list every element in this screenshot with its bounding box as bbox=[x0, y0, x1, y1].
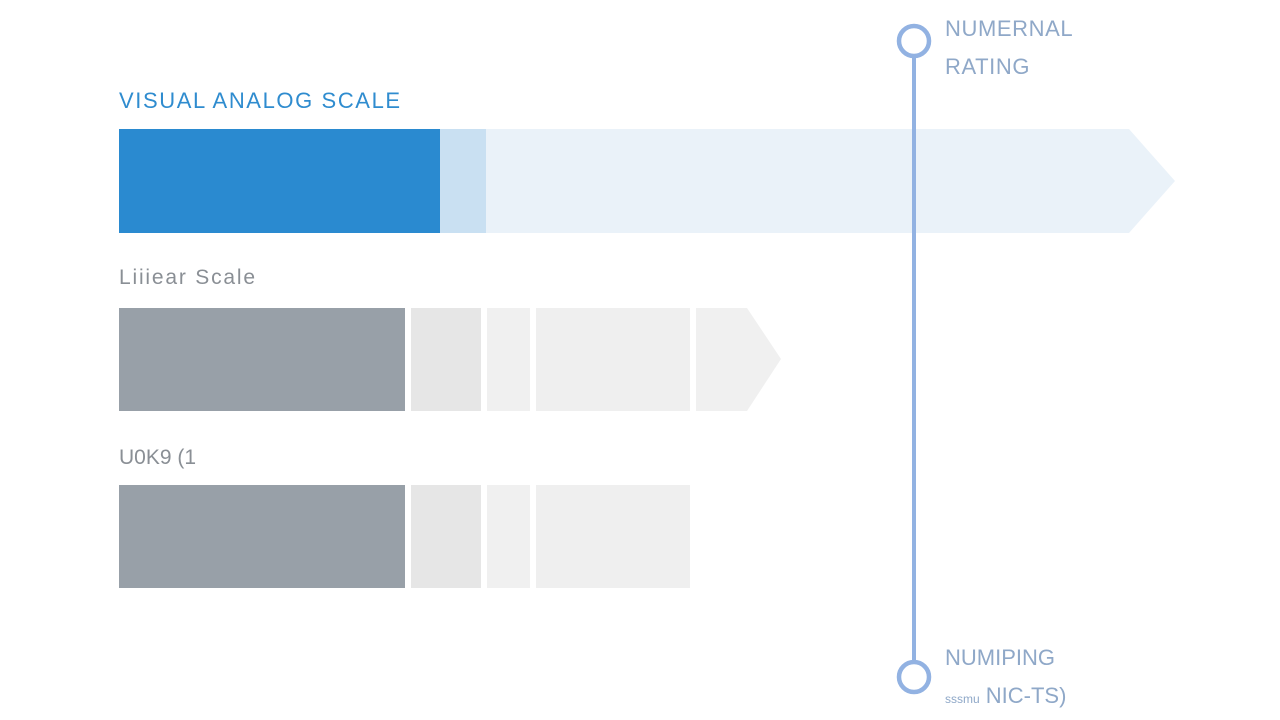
bar: visual analog scale bbox=[119, 129, 1175, 233]
label: numeral rating: RATING bbox=[945, 54, 1030, 79]
label: linear scale: Liiiear Scale bbox=[119, 266, 257, 289]
bar: third scale bbox=[119, 485, 690, 588]
bar: linear scale bbox=[119, 308, 781, 411]
title: visual analog scale: VISUAL ANALOG SCALE bbox=[119, 88, 402, 113]
label: numeral rating: NUMERNAL bbox=[945, 16, 1073, 41]
label: third scale: U0K9 (1 bbox=[119, 446, 196, 469]
label: bottom axis end: sssmu NIC-TS) bbox=[945, 683, 1066, 708]
label: numeral rating bbox=[945, 16, 1073, 79]
label: bottom axis end: NUMIPING bbox=[945, 645, 1055, 670]
vertical axis line with end circles bbox=[896, 24, 932, 694]
label: bottom axis end bbox=[945, 645, 1066, 708]
